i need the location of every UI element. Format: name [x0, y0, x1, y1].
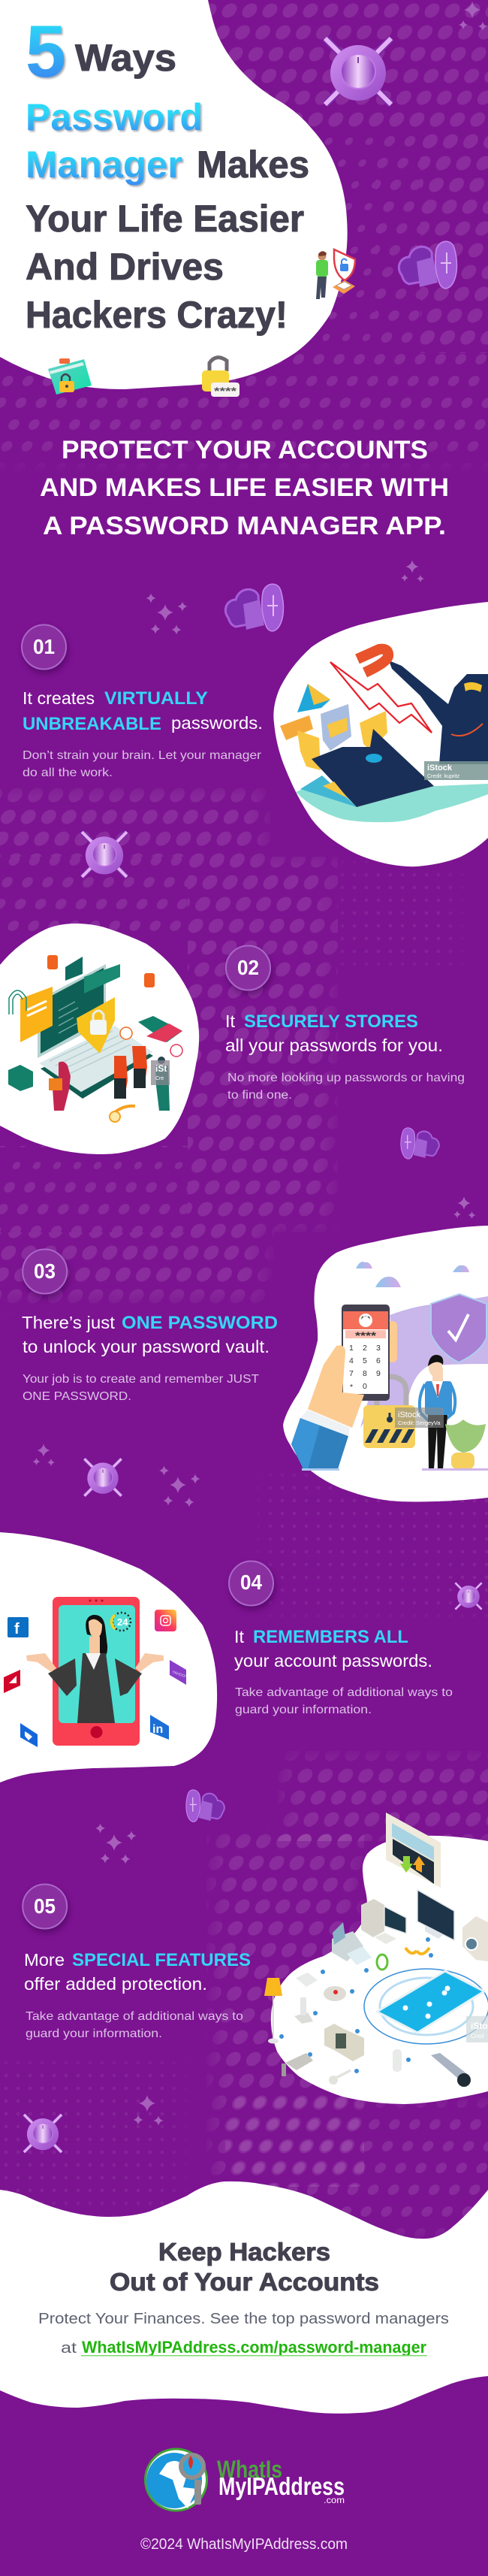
step 3 heading: ONE PASSWORD — [122, 1313, 278, 1333]
keypad: 6 — [376, 1356, 381, 1365]
step 3 heading: There’s just — [22, 1313, 116, 1332]
subheading line 1: PROTECT YOUR ACCOUNTS — [62, 436, 428, 464]
watermark — [424, 761, 488, 780]
step 5 heading — [24, 1950, 251, 1994]
envelope — [297, 684, 330, 712]
air sensor — [393, 2049, 402, 2072]
key — [333, 2070, 351, 2079]
key — [110, 1106, 135, 1117]
title line: And Drives: And Drives — [26, 246, 224, 288]
step 5 heading: More — [24, 1950, 65, 1970]
badge 05: 05 — [34, 1894, 56, 1918]
alert bubble — [170, 1045, 182, 1057]
step 3 description: ONE PASSWORD. — [23, 1390, 131, 1403]
subheading line 2: AND MAKES LIFE EASIER WITH — [40, 473, 449, 502]
step 3 description: Your job is to create and remember JUST — [23, 1373, 259, 1386]
sunglasses — [405, 1948, 429, 1954]
panel: illustration blob 4 — [0, 1532, 217, 1782]
subheading line 3: A PASSWORD MANAGER APP. — [43, 512, 446, 540]
illustration: hacker with magnet: Credit: kupritz — [427, 774, 460, 779]
illustration: smart home devices: iSto — [471, 2021, 488, 2031]
title line: Password: Password — [26, 96, 203, 138]
jacket — [77, 1653, 115, 1723]
call to action heading: Keep Hackers — [158, 2238, 330, 2266]
keypad: 4 — [349, 1356, 354, 1365]
logo wordmark: .com — [324, 2495, 345, 2505]
icon: vault dial 4 — [455, 1583, 482, 1610]
panel: step 2 — [225, 945, 465, 1102]
wifi router — [296, 1973, 318, 1987]
documents — [321, 704, 351, 751]
facebook icon — [8, 1617, 29, 1637]
badge 04: 04 — [240, 1571, 262, 1594]
step 4 description — [235, 1686, 453, 1716]
watermark — [395, 1407, 444, 1428]
panel: step 1 — [22, 625, 263, 779]
watermark — [151, 1060, 170, 1085]
step 1 description: do all the work. — [23, 766, 113, 779]
step 1 heading — [23, 688, 263, 734]
call to action text: Protect Your Finances. See the top password managers — [38, 2311, 449, 2327]
yahoo icon: YAHOO! — [171, 1670, 186, 1679]
credit card — [280, 715, 313, 740]
step 4 heading: It — [234, 1627, 245, 1646]
step 2 heading: It — [225, 1011, 236, 1031]
24 hour icon: 24 — [117, 1616, 128, 1628]
shield — [431, 1294, 486, 1362]
hacker figure — [389, 661, 488, 764]
facebook icon: f — [14, 1621, 20, 1637]
magnet — [357, 649, 388, 673]
step 5 description: Take advantage of additional ways to — [26, 2010, 243, 2023]
step 3 description — [23, 1373, 259, 1403]
step 4 heading: REMEMBERS ALL — [253, 1627, 408, 1647]
panel: illustration blob 5 — [271, 1836, 488, 2104]
sparkles right — [453, 1196, 476, 1219]
padlock shackle — [377, 1377, 406, 1407]
step 3 heading: to unlock your password vault. — [23, 1337, 270, 1356]
step 1 heading: It creates — [23, 688, 95, 708]
badge 03 — [23, 1249, 67, 1294]
icon: padlock with password: **** — [214, 385, 237, 397]
phone — [342, 1305, 390, 1401]
step 4 description: Take advantage of additional ways to — [235, 1686, 453, 1699]
illustration: laptop with security guards: iSt — [155, 1063, 167, 1074]
illustration: hacker with magnet: iStock — [427, 763, 453, 772]
step 1 heading: VIRTUALLY — [104, 688, 208, 709]
robot vacuum — [324, 1986, 346, 2001]
title line: Hackers Crazy: Hackers Crazy! — [26, 294, 288, 336]
icon: cloud vault flipped lower — [186, 1790, 224, 1822]
illustration: smart home devices — [264, 1813, 488, 2087]
man — [420, 1384, 455, 1422]
lightning — [330, 662, 432, 733]
laptop — [312, 729, 434, 807]
seated woman — [53, 1062, 71, 1111]
icon: padlock with password — [202, 358, 239, 397]
panel: step 4 — [229, 1562, 453, 1716]
call to action heading: Out of Your Accounts — [110, 2268, 379, 2296]
watermark — [466, 2016, 488, 2042]
orange login panel — [20, 987, 53, 1042]
sparkles bottom — [134, 2095, 164, 2125]
password panel — [84, 964, 120, 993]
keypad: 9 — [376, 1369, 381, 1378]
hand — [308, 1345, 364, 1428]
panel: call to action wave — [0, 2181, 488, 2414]
badge 01 — [22, 625, 66, 669]
teal wave ground — [296, 782, 488, 822]
illustration: laptop with security guards — [8, 955, 182, 1122]
step 5 heading: SPECIAL FEATURES — [72, 1950, 251, 1970]
woman hair and face — [86, 1615, 107, 1661]
title line: Ways: Ways — [75, 37, 176, 79]
icon: vault dial 2 — [82, 832, 127, 877]
title line: Manager: Manager — [26, 144, 182, 186]
illustration: phone and padlock: **** — [355, 1329, 377, 1341]
fingers — [387, 1321, 397, 1362]
24 hour icon — [111, 1613, 131, 1631]
security camera — [285, 2053, 313, 2070]
copyright: ©2024 WhatIsMyIPAddress.com — [140, 2536, 348, 2553]
illustration: hacker with magnet — [280, 649, 488, 822]
keypad — [349, 1344, 381, 1392]
keypad: 1 — [349, 1344, 354, 1353]
title numeral 5: 5 — [26, 10, 66, 92]
smartphone rings — [364, 1969, 488, 2044]
illustration: laptop with security guards: Cre — [155, 1076, 164, 1081]
keypad: 7 — [349, 1369, 354, 1378]
cordless phone — [294, 2012, 313, 2024]
ground lines — [302, 1468, 339, 1471]
speakers — [324, 2024, 364, 2061]
keypad: 8 — [363, 1369, 367, 1378]
laptop screen — [38, 964, 106, 1058]
panel: step 3 — [22, 1249, 278, 1403]
keypad: 2 — [363, 1344, 367, 1353]
step 4 description: guard your information. — [235, 1704, 372, 1716]
panel: illustration blob 3 — [283, 1226, 488, 1501]
globe tile — [65, 957, 83, 981]
step 5 description — [26, 2010, 243, 2040]
logo wordmark — [217, 2456, 345, 2505]
red video icon — [4, 1670, 20, 1693]
padlock body — [363, 1405, 415, 1448]
icon: locked folder — [48, 358, 92, 395]
sparkles lower — [95, 1823, 137, 1864]
illustration: smart home devices: Cred — [471, 2033, 483, 2039]
panel: title blob — [0, 0, 348, 389]
step 5 heading: offer added protection. — [24, 1974, 207, 1994]
logo — [146, 2449, 345, 2511]
code lines — [59, 1002, 78, 1033]
call to action link: at — [61, 2340, 77, 2357]
badge 02: 02 — [237, 956, 259, 979]
icon: cloud vault top — [399, 241, 456, 289]
icon: cloud vault center — [225, 584, 283, 631]
title line: Your Life Easier: Your Life Easier — [26, 198, 304, 240]
yahoo icon — [170, 1660, 186, 1685]
logo wordmark: WhatIs — [217, 2456, 282, 2483]
title line: Makes: Makes — [197, 144, 309, 186]
clouds — [356, 1262, 469, 1287]
fingerprint — [9, 990, 26, 1014]
sparkles lower left — [33, 1444, 55, 1466]
sparkles top right — [459, 2, 487, 31]
keypad: * — [350, 1383, 353, 1392]
badge 02 — [226, 945, 270, 990]
guard left — [114, 1056, 128, 1097]
guard right — [132, 1046, 147, 1088]
hands — [26, 1653, 56, 1672]
step 5 description: guard your information. — [26, 2027, 162, 2040]
badge 01: 01 — [33, 635, 55, 658]
step 4 heading: your account passwords. — [234, 1651, 432, 1670]
icon: vault dial 3 — [84, 1459, 122, 1496]
laptop keyboard base — [39, 1026, 152, 1092]
panel: illustration blob 1 — [273, 602, 488, 866]
illustration: woman in phone with social icons — [4, 1597, 186, 1747]
desktop pc — [361, 1899, 384, 1937]
step 2 heading: all your passwords for you. — [225, 1036, 443, 1055]
keypad: 0 — [363, 1382, 367, 1391]
sparkles right of subheading — [401, 561, 424, 582]
step 1 heading: passwords. — [171, 713, 263, 733]
lavender background wave — [360, 1296, 488, 1428]
hoverboard — [431, 2053, 469, 2082]
chat bubble — [120, 1027, 132, 1039]
floor lamp — [264, 1978, 282, 1996]
step 2 description: No more looking up passwords or having — [227, 1072, 465, 1084]
card — [138, 1016, 182, 1042]
dropbox icon — [20, 1723, 38, 1747]
keypad: 3 — [376, 1344, 381, 1353]
panel: step 5 — [23, 1885, 251, 2040]
device connection dots — [279, 1937, 433, 2073]
step 1 description: Don’t strain your brain. Let your manager — [23, 749, 262, 762]
subheading — [40, 436, 449, 540]
step 3 heading — [22, 1313, 278, 1356]
sparkles middle — [159, 1465, 200, 1507]
icon: person with shield — [316, 249, 355, 299]
icon: vault dial 5 — [24, 2115, 62, 2152]
fitness band — [377, 1955, 387, 1970]
badge 03: 03 — [34, 1259, 56, 1283]
call to action link: WhatIsMyIPAddress.com/password-manager — [82, 2338, 426, 2357]
info badges — [47, 955, 58, 969]
logo wordmark: MyIPAddress — [218, 2472, 345, 2500]
laptop base shadow — [41, 1037, 153, 1099]
washing machine — [462, 1916, 488, 1961]
instagram icon — [155, 1610, 176, 1631]
phone — [53, 1597, 140, 1746]
illustration: phone and padlock: iStock — [398, 1410, 420, 1420]
step 2 heading — [225, 1011, 443, 1055]
step 2 description — [227, 1072, 465, 1102]
step 1 description — [23, 749, 262, 779]
logo globe — [146, 2449, 207, 2511]
step 1 heading: UNBREAKABLE — [23, 714, 161, 734]
shield with lock — [77, 997, 115, 1054]
call to action heading — [110, 2238, 379, 2296]
title — [26, 10, 309, 336]
cube — [8, 1065, 33, 1091]
wall screen with arrows — [386, 1813, 441, 1888]
linkedin icon — [150, 1715, 169, 1740]
icon: vault dial top — [325, 38, 391, 104]
step 2 heading: SECURELY STORES — [244, 1011, 418, 1032]
step 4 heading — [234, 1627, 432, 1670]
panel: illustration blob 2 — [0, 924, 199, 1154]
standing woman — [155, 1066, 170, 1111]
keypad: 5 — [363, 1356, 367, 1365]
step 2 description: to find one. — [227, 1089, 292, 1102]
printer — [332, 1931, 363, 1961]
badge 05 — [23, 1885, 67, 1928]
plant — [445, 1420, 486, 1453]
icon: cloud vault flipped — [401, 1128, 439, 1159]
sparkles center — [146, 594, 188, 634]
illustration: phone and padlock: Credit: SergeyVa — [398, 1420, 441, 1426]
smartphone — [377, 1971, 484, 2033]
sleeve — [291, 1418, 348, 1469]
linkedin icon: in — [152, 1723, 163, 1736]
illustration: phone and padlock — [291, 1262, 488, 1471]
tv — [417, 1890, 454, 1940]
keyboard grid — [50, 1031, 131, 1075]
badge 04 — [229, 1562, 273, 1605]
